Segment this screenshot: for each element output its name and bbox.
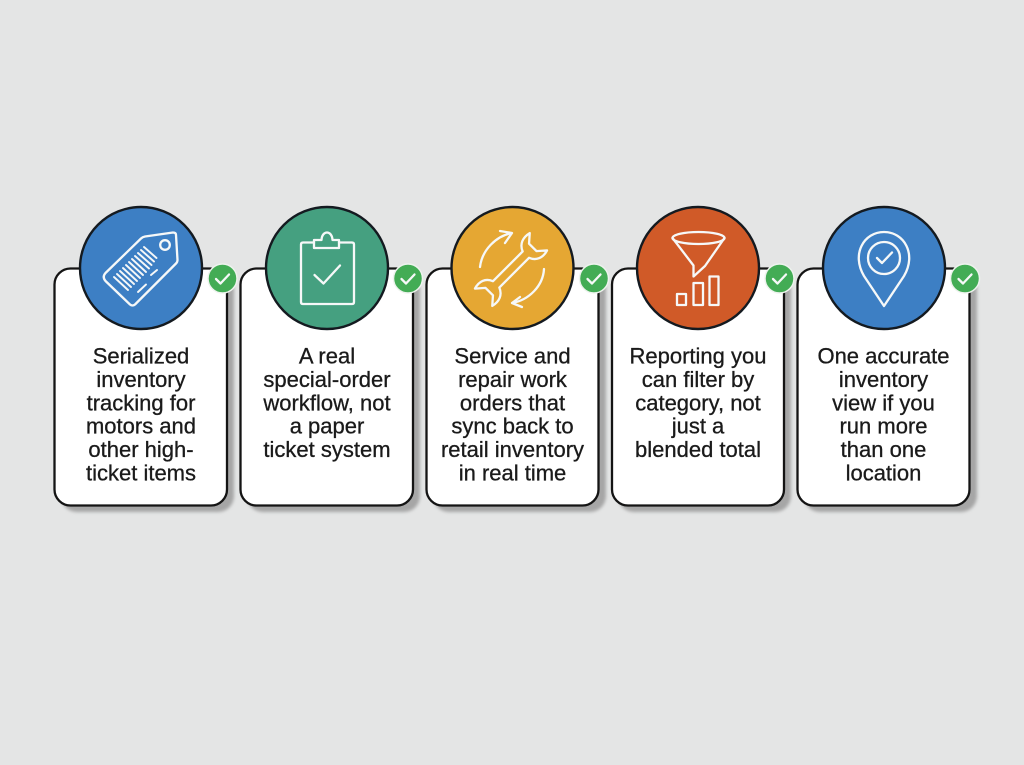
card text: inventory <box>839 367 928 392</box>
icon circle: price tag <box>80 207 202 329</box>
card text: ticket items <box>86 460 196 485</box>
icon circle: location pin <box>823 207 945 329</box>
card text: can filter by <box>642 367 754 392</box>
icon circle: funnel and bars <box>637 207 759 329</box>
card text: location <box>846 460 921 485</box>
card text: A real <box>299 344 355 368</box>
card text: in real time <box>459 460 566 485</box>
card text: motors and <box>86 414 196 439</box>
status check badge <box>580 264 608 293</box>
card text: One accurate <box>817 344 950 368</box>
icon circle: wrench and sync arrows <box>452 207 574 329</box>
card text: inventory <box>96 367 186 392</box>
card text: tracking for <box>87 390 195 415</box>
card text: retail inventory <box>441 437 584 462</box>
card text: special-order <box>263 367 391 392</box>
card text: a paper <box>290 414 364 439</box>
card text: blended total <box>635 437 761 462</box>
card text: ticket system <box>263 437 391 462</box>
icon circle: clipboard <box>266 207 388 329</box>
panel: accurate inventory view <box>798 207 980 512</box>
card text: than one <box>841 437 926 462</box>
panel: service and repair <box>426 207 608 512</box>
panel: serialized inventory <box>54 207 237 512</box>
card text: repair work <box>458 367 568 392</box>
status check badge <box>765 264 794 293</box>
card text: category, not <box>635 390 761 415</box>
card text: sync back to <box>451 414 574 439</box>
card text: view if you <box>832 390 935 415</box>
card text: Serialized <box>93 344 189 368</box>
card text: other high- <box>88 437 194 462</box>
card text: Reporting you <box>630 344 766 368</box>
card text: Service and <box>454 344 571 368</box>
card text: orders that <box>460 390 565 415</box>
status check badge <box>208 264 237 293</box>
panel: special-order workflow <box>240 207 422 512</box>
panel: category reporting <box>612 207 794 512</box>
status check badge <box>394 264 422 293</box>
card text: workflow, not <box>262 390 391 415</box>
card text: run more <box>839 414 928 439</box>
status check badge <box>950 264 980 293</box>
card text: just a <box>671 414 725 439</box>
